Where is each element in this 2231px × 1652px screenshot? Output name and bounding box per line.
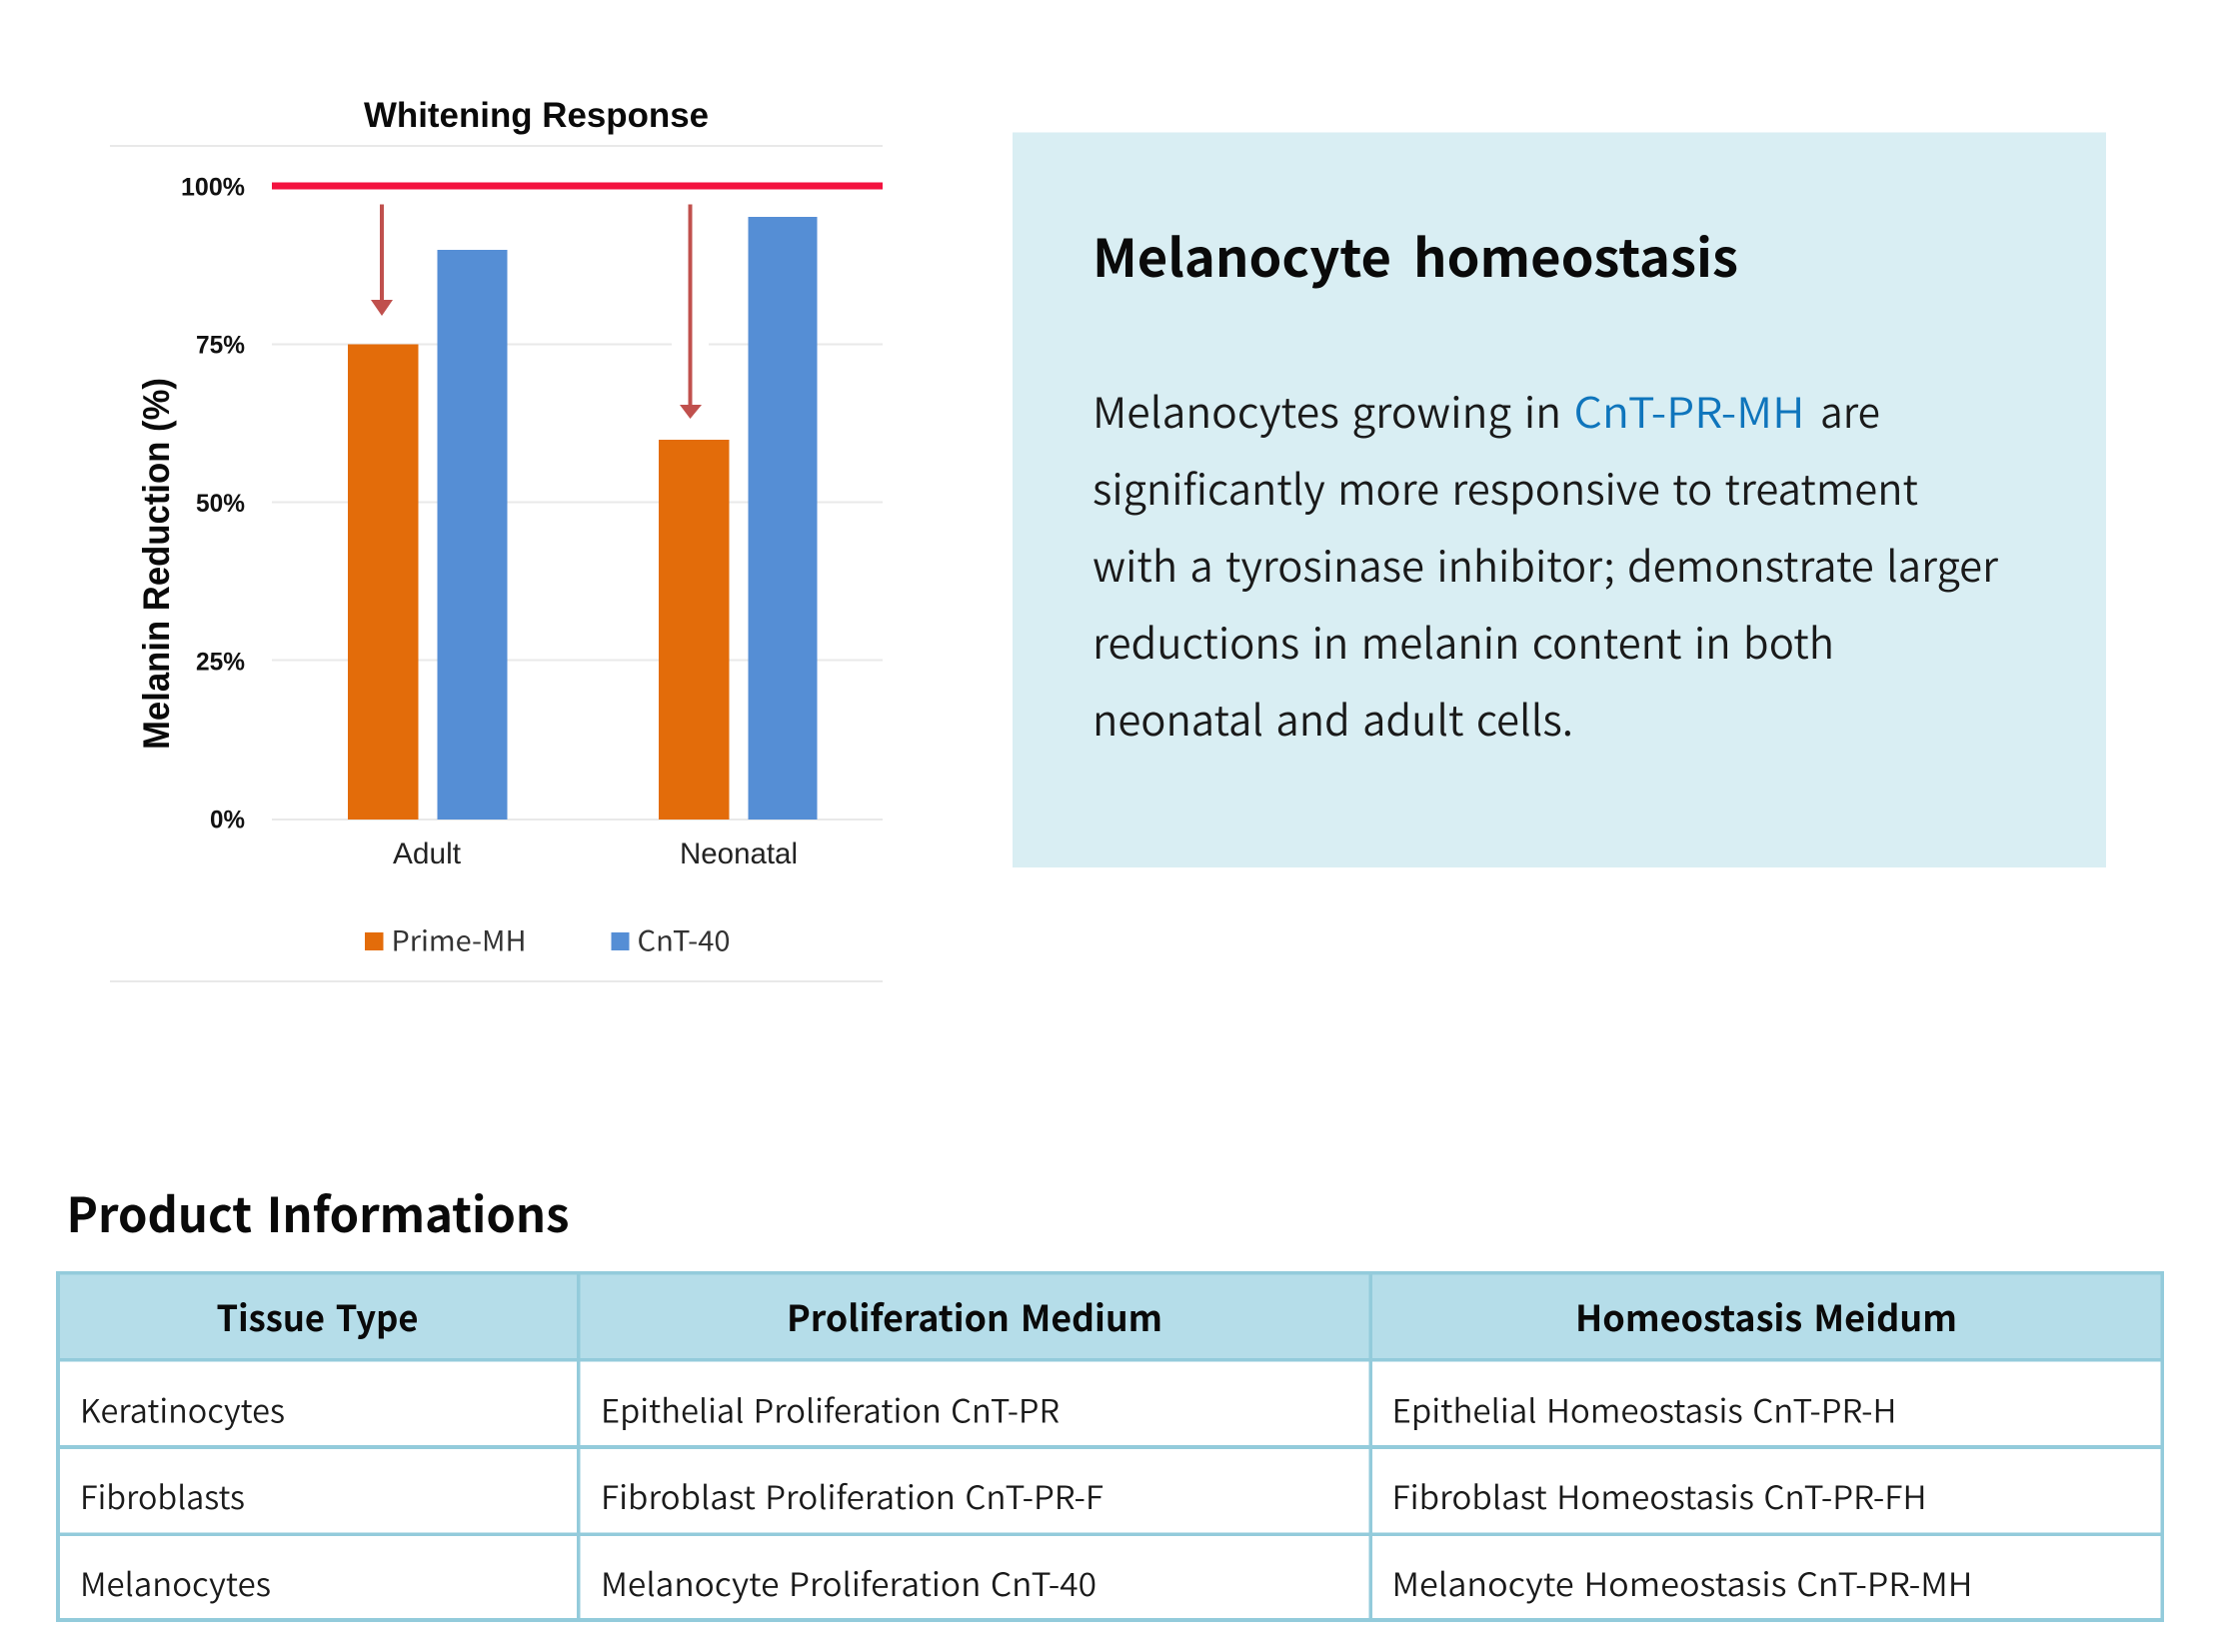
x axis labels: Adult [393, 837, 462, 870]
panel body text: neonatal and adult cells. [1093, 688, 1573, 749]
panel heading: Melanocyte homeostasis [1093, 217, 1738, 292]
y axis tick labels: 75% [196, 332, 245, 360]
panel body text: Melanocytes growing in [1093, 380, 1561, 441]
bars: adult [348, 250, 508, 820]
table row: keratinocytes: Epithelial Homeostasis CnT-PR-H [1391, 1387, 1897, 1433]
panel: melanocyte homeostasis [1013, 132, 2106, 867]
legend: Prime-MH [392, 919, 526, 959]
panel body text: are [1820, 380, 1880, 441]
table row: keratinocytes [80, 1387, 1897, 1433]
table row: melanocytes [80, 1560, 1973, 1606]
table row: keratinocytes: Epithelial Proliferation CnT-PR [601, 1387, 1060, 1433]
table header row: Homeostasis Meidum [1575, 1290, 1957, 1342]
legend: CnT-40 [638, 919, 730, 959]
table row: fibroblasts: Fibroblast Proliferation CnT-PR-F [601, 1473, 1104, 1519]
y axis tick labels [181, 174, 245, 833]
panel body text: reductions in melanin content in both [1093, 611, 1834, 672]
table row: melanocytes: Melanocyte Homeostasis CnT-PR-MH [1391, 1560, 1973, 1606]
table: product information [56, 1271, 2164, 1622]
y axis tick labels: 100% [181, 174, 245, 202]
panel body text [1093, 380, 1999, 749]
arrow: adult reduction [371, 204, 393, 316]
x axis labels [393, 837, 798, 870]
reference line at 100% [272, 182, 883, 190]
table header row: Proliferation Medium [787, 1290, 1162, 1342]
table row: melanocytes: Melanocytes [80, 1560, 271, 1606]
y axis tick labels: 0% [210, 806, 245, 833]
panel body text: with a tyrosinase inhibitor; demonstrate larger [1093, 534, 1999, 595]
heading: product informations: Product Informations [66, 1176, 570, 1246]
arrow: neonatal reduction [680, 204, 702, 419]
table row: fibroblasts [80, 1473, 1927, 1519]
table row: melanocytes: Melanocyte Proliferation CnT-40 [601, 1560, 1097, 1606]
table row: keratinocytes: Keratinocytes [80, 1387, 285, 1433]
table row: fibroblasts: Fibroblast Homeostasis CnT-PR-FH [1391, 1473, 1927, 1519]
panel: whitening response bar chart [110, 96, 883, 981]
y axis tick labels: 50% [196, 490, 245, 518]
panel body text: significantly more responsive to treatment [1093, 457, 1918, 518]
table header row: Tissue Type [216, 1290, 418, 1342]
bars: neonatal [659, 217, 818, 820]
table row: fibroblasts: Fibroblasts [80, 1473, 245, 1519]
table header row [56, 1271, 2164, 1361]
chart title: Whitening Response [364, 96, 709, 135]
y axis tick labels: 25% [196, 648, 245, 676]
x axis labels: Neonatal [680, 837, 798, 870]
y axis title: Melanin Reduction (%) [136, 378, 177, 750]
legend [365, 919, 730, 959]
panel body text: CnT-PR-MH [1573, 380, 1805, 441]
